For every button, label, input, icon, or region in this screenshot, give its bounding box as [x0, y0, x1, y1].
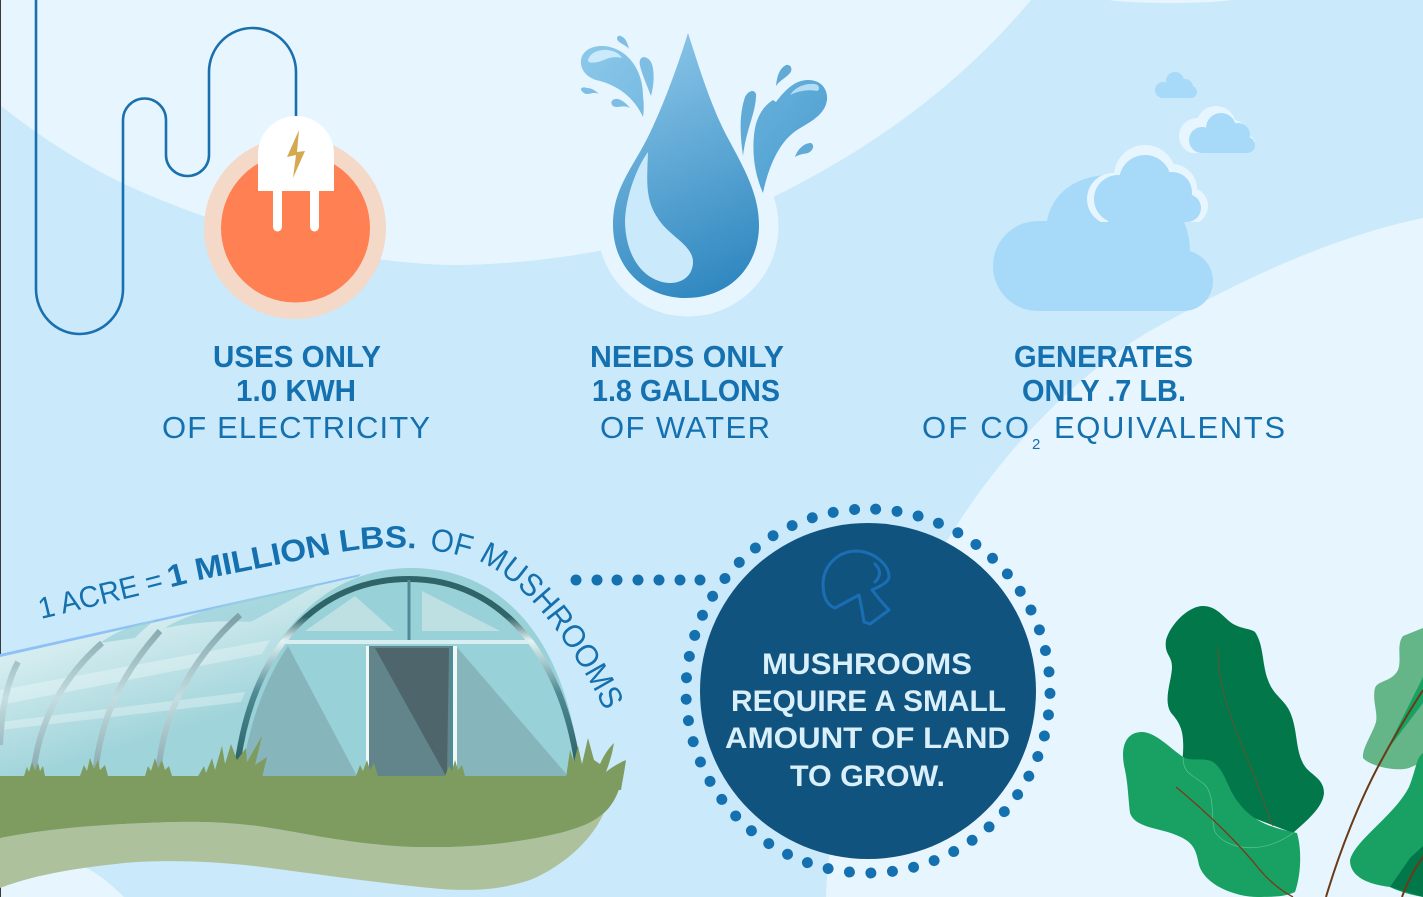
heading: electricity [162, 339, 430, 445]
middle cloud [1094, 155, 1201, 223]
greenhouse roof edge [0, 574, 361, 660]
drop highlight [625, 152, 693, 283]
tunnel ribs [0, 615, 240, 776]
window crossbar [284, 640, 528, 644]
heading: water [590, 339, 784, 445]
ground light [0, 807, 606, 890]
door jamb [450, 646, 453, 776]
socket circle [204, 137, 386, 319]
right panel shadow [456, 646, 568, 776]
small cloud [1189, 113, 1255, 153]
dark leaf [1166, 606, 1324, 833]
drop halo [598, 136, 778, 316]
callout: land use [679, 502, 1057, 880]
leaf overlap outline [1183, 757, 1293, 848]
background: upper light wave [0, 0, 1031, 265]
door [366, 646, 457, 776]
page edge [0, 0, 1, 897]
heading: water: OF WATER [600, 410, 770, 445]
curved label: 1 acre = 1 million lbs. of mushrooms: OF MUSHROOMS [432, 529, 622, 708]
icon: water drop [581, 33, 827, 316]
heading: emissions: EQUIVALENTS [1054, 410, 1285, 445]
illustration: greenhouse [0, 568, 626, 890]
heading: emissions [922, 339, 1285, 453]
callout text: TO GROW. [790, 760, 945, 793]
light leaf [1123, 732, 1300, 897]
ground dark [0, 776, 622, 847]
tiny cloud [1155, 72, 1197, 98]
heading: water: NEEDS ONLY [590, 339, 784, 374]
heading: electricity: USES ONLY [213, 339, 381, 374]
right splash shine [790, 84, 819, 95]
callout text: MUSHROOMS [762, 648, 972, 681]
dotted connector [570, 574, 706, 586]
icon: clouds [993, 72, 1255, 311]
small cloud halo [1179, 106, 1255, 154]
lightning bolt [287, 130, 305, 178]
arch frame [236, 579, 579, 776]
light leaf vein [1176, 787, 1293, 897]
tunnel highlights [0, 640, 270, 730]
window frames [408, 580, 410, 640]
callout text: REQUIRE A SMALL [731, 685, 1006, 718]
door panel [369, 646, 452, 776]
right droplets [741, 65, 813, 157]
arch end panel [238, 580, 577, 776]
top window glass [305, 591, 500, 631]
dark leaf vein [1218, 647, 1273, 826]
arch outer band [235, 568, 580, 776]
callout text: AMOUNT OF LAND [725, 722, 1010, 755]
greenhouse tunnel body [0, 576, 361, 776]
main drop [613, 33, 759, 298]
background: top edge light patch [1095, 0, 1245, 3]
large cloud [993, 175, 1213, 311]
muted leaf green stripe [1385, 677, 1423, 753]
heading: electricity: OF ELECTRICITY [162, 410, 430, 445]
heading: emissions: GENERATES [1014, 339, 1193, 374]
lower right leaf shade [1390, 846, 1423, 897]
right splash [753, 80, 827, 193]
icon: electric plug [36, 0, 386, 334]
grass tufts [24, 736, 626, 790]
dotted ring [679, 502, 1057, 880]
curved label: 1 acre = 1 million lbs. of mushrooms: 1 ACRE = [40, 575, 162, 618]
background: lower right light wave [826, 218, 1423, 897]
tunnel teal patches [100, 584, 320, 643]
middle cloud halo [1087, 145, 1208, 225]
heading: emissions: 2 [1032, 436, 1040, 453]
curved label: 1 acre = 1 million lbs. of mushrooms: 1 MILLION LBS. [168, 526, 414, 587]
left droplets [581, 36, 654, 108]
heading: water: 1.8 GALLONS [592, 373, 780, 408]
illustration: leaves [1123, 606, 1423, 897]
door shadow [375, 648, 449, 776]
left panel shadow [242, 646, 357, 776]
left splash [581, 46, 644, 117]
heading: electricity: 1.0 KWH [236, 373, 356, 408]
icon: mushroom [823, 551, 889, 624]
muted right leaf [1363, 628, 1423, 769]
left splash shine [588, 50, 622, 63]
heading: emissions: OF CO [922, 410, 1029, 445]
plug head [258, 116, 334, 191]
socket inner circle [221, 154, 370, 302]
plug prongs [273, 190, 319, 232]
curved label: 1 acre = 1 million lbs. of mushrooms [40, 526, 622, 708]
plug cord [36, 0, 296, 334]
background: lower left light patch [0, 867, 124, 897]
callout text [725, 648, 1010, 793]
lower right leaf [1350, 753, 1423, 897]
plant stems [1326, 690, 1423, 897]
callout disc [700, 523, 1036, 859]
heading: emissions: ONLY .7 LB. [1022, 373, 1186, 408]
